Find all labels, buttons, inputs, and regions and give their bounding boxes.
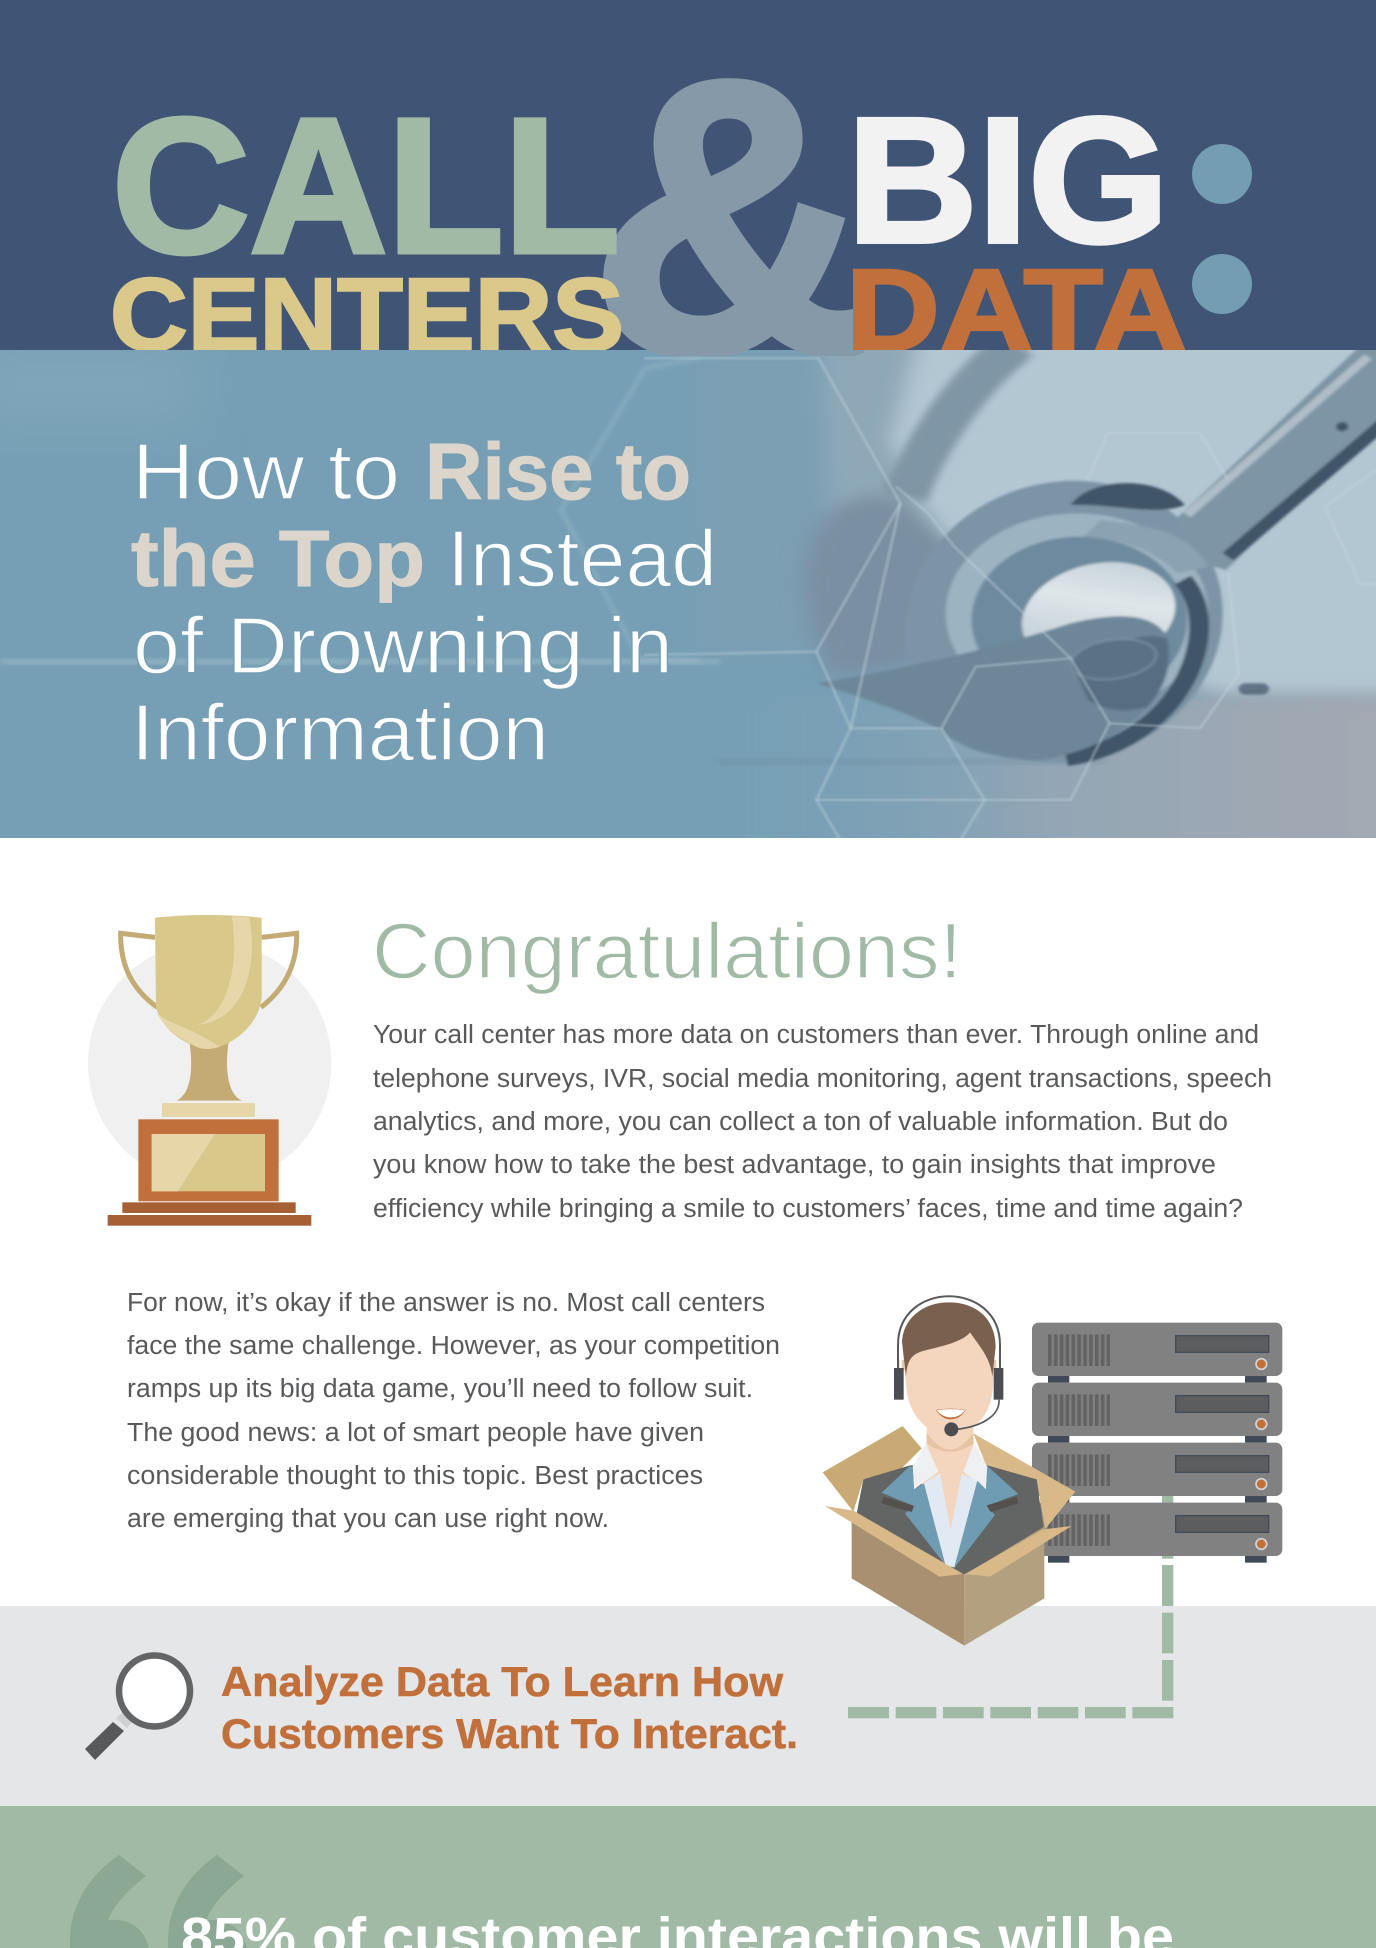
illustration: agent, box and servers [823,1296,1282,1718]
subtitle: the Top [131,514,425,603]
text block: second paragraph: considerable thought to this topic. Best practices [127,1462,703,1490]
text block: second paragraph: The good news: a lot of smart people have given [127,1419,704,1447]
text block: intro paragraph: Your call center has more data on customers than ever. Through online and [373,1021,1259,1049]
gray band [0,1606,1376,1806]
icon: open box back flaps [823,1426,1075,1529]
subtitle: of Drowning in [133,601,673,690]
icon: call center agent [857,1296,1044,1575]
heading: analyze data [221,1658,798,1757]
text block: intro paragraph: efficiency while bringing a smile to customers’ faces, time and time again? [373,1195,1243,1223]
panel: quote band [0,1806,1376,1948]
ampersand: & [590,0,872,435]
subtitle: How to [132,427,400,516]
text block: second paragraph: face the same challenge. However, as your competition [127,1332,780,1360]
icon: colon dots [1192,144,1252,314]
text block: second paragraph [127,1289,780,1533]
heading: analyze data: Customers Want To Interact. [221,1710,798,1757]
text block: second paragraph: are emerging that you can use right now. [127,1505,609,1533]
title word: CENTERS: CENTERS [110,257,624,372]
icon: trophy [88,915,331,1226]
title word: BIG: BIG [847,80,1169,280]
text block: intro paragraph [373,1021,1272,1223]
text block: intro paragraph: telephone surveys, IVR, social media monitoring, agent transactions, speech [373,1065,1272,1093]
heading: analyze data: Analyze Data To Learn How [221,1658,783,1705]
title word: DATA: DATA [846,245,1187,375]
text block: intro paragraph: analytics, and more, you can collect a ton of valuable information. But do [373,1108,1228,1136]
icon: server rack [1032,1323,1282,1563]
arrow: dashed connector [848,1493,1173,1718]
icon: quotation marks [70,1855,248,1948]
heading: Congratulations: Congratulations! [372,906,962,995]
text block: intro paragraph: you know how to take the best advantage, to gain insights that improve [373,1151,1216,1179]
subtitle: Instead [447,514,717,603]
subtitle [131,427,717,777]
icon: open box front [825,1506,1072,1646]
subtitle: Rise to [425,427,691,516]
subtitle: Information [131,688,549,777]
photo panel: headset [0,350,1376,838]
header band [0,0,1376,350]
title [113,115,1186,350]
text block: second paragraph: ramps up its big data game, you’ll need to follow suit. [127,1375,753,1403]
title word: CALL: CALL [112,78,620,293]
icon: magnifying glass [85,1656,190,1760]
text block: second paragraph: For now, it’s okay if the answer is no. Most call centers [127,1289,765,1317]
